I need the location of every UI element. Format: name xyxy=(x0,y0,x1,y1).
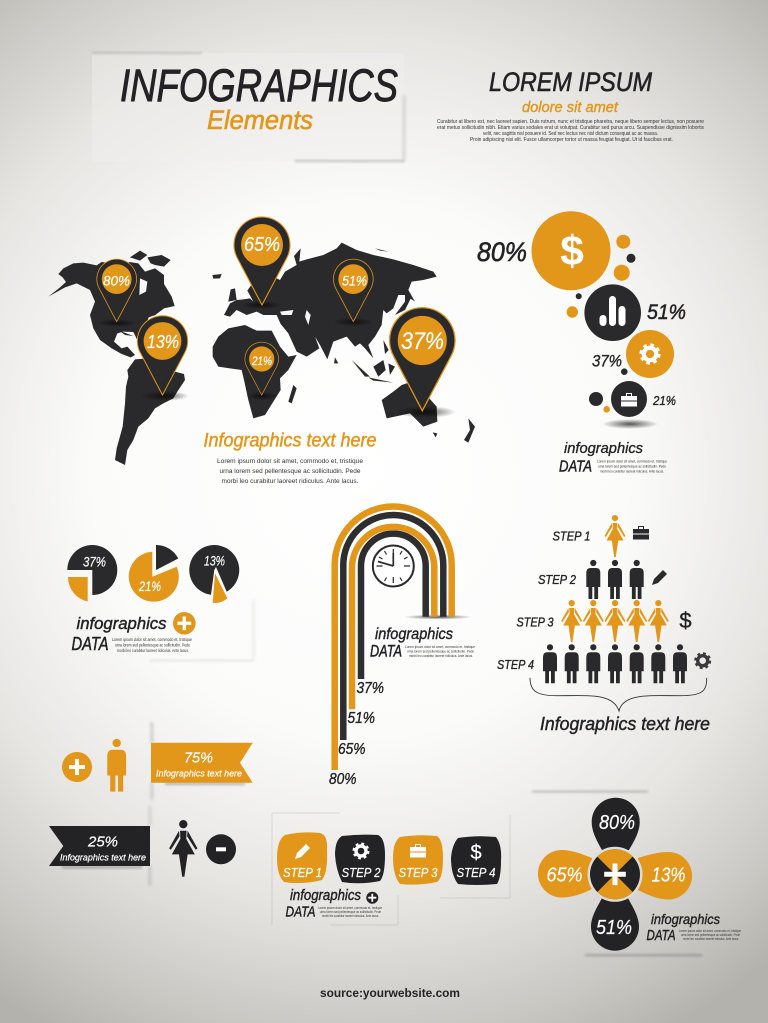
ribbon: 25% xyxy=(49,826,150,866)
petal: 51% xyxy=(591,898,639,951)
pie caption: urna lorem sed pellentesque ac sollicitudin. Pede xyxy=(115,642,190,648)
intro paragraph: velit, nec sagittis nisl posuere id. Sed nec lectus nec nisl dictum consequat ac ac massa. xyxy=(483,131,658,137)
bubble caption: Lorem ipsum dolor sit amet, commodo et, tristique xyxy=(597,460,667,464)
intro paragraph: erat metus sollicitudin nibh. Etiam varius sodales erat ut volutpat. Curabitur sed purus arcu. Suspendisse dignissim lobortis xyxy=(437,125,704,131)
bubble: 80% dollar xyxy=(477,211,610,290)
bubble: 21% briefcase xyxy=(611,381,676,417)
caption body: morbi leo curabitur laoreet ridiculus. Ante lacus. xyxy=(222,478,359,485)
ribbon: 75%: 75% xyxy=(184,750,213,766)
map pin: 80%: 80% xyxy=(103,274,130,288)
petal: 80%: 80% xyxy=(599,812,635,834)
map pin: 65%: 65% xyxy=(244,234,280,256)
flower caption xyxy=(646,911,741,944)
flower caption: urna lorem sed pellentesque ac sollicitudin. Pede xyxy=(681,933,740,937)
icon: pencil xyxy=(652,570,667,585)
brace xyxy=(530,678,707,711)
map pin: 13% xyxy=(137,316,188,395)
bubble: 37% gear: 37% xyxy=(592,352,622,370)
pie caption: Lorem ipsum dolor sit amet, commodo et, tristique xyxy=(112,637,192,642)
flower chart xyxy=(532,791,741,956)
row 2: men xyxy=(586,560,644,599)
world map xyxy=(48,243,475,465)
flower caption: Lorem ipsum dolor sit amet, commodo et, tristique xyxy=(679,929,741,933)
heading: INFOGRAPHICS: INFOGRAPHICS xyxy=(120,60,398,111)
arch: 51% xyxy=(352,527,434,709)
icon: dark woman xyxy=(169,820,197,877)
bubble: 37% gear xyxy=(592,330,674,378)
icon: gear xyxy=(695,653,710,668)
caption heading: Infographics text here xyxy=(204,430,376,452)
pie caption: infographics xyxy=(76,614,167,633)
subheading: Elements: Elements xyxy=(207,105,313,135)
flower caption: morbi leo curabitur laoreet ridiculus. Ante lacus. xyxy=(683,937,739,941)
row 4: men xyxy=(543,644,687,683)
intro paragraph xyxy=(437,119,704,143)
petal: 51%: 51% xyxy=(596,917,632,939)
bubble caption: DATA xyxy=(559,458,592,476)
map pin: 37% xyxy=(390,308,455,411)
icon: clock xyxy=(373,546,414,586)
intro paragraph: Proin adipiscing nisi elit. Fusce ullamcorper tortor ut massa feugiat feugiat. Ut id faucibus erat. xyxy=(470,137,673,143)
steps caption: infographics xyxy=(290,888,361,904)
step labels: STEP 4 xyxy=(497,657,534,672)
map pin shadows xyxy=(97,301,456,418)
bubble caption: infographics xyxy=(564,440,643,457)
row 1: woman xyxy=(604,515,626,557)
map pin: 80% xyxy=(97,259,137,322)
icon: dark plus xyxy=(366,892,378,904)
pie: 13%: 13% xyxy=(204,552,225,568)
bubble caption xyxy=(559,440,667,476)
ribbon: 75%: Infographics text here xyxy=(156,769,242,780)
icon: plus xyxy=(173,612,196,635)
arch caption: infographics xyxy=(375,626,453,643)
steps caption: DATA xyxy=(286,904,316,920)
step 2: STEP 2 xyxy=(342,866,381,880)
step labels xyxy=(497,528,590,672)
step labels: STEP 2 xyxy=(538,572,577,587)
petal: 13%: 13% xyxy=(652,864,686,886)
step labels: STEP 1 xyxy=(552,528,590,544)
pie: 13% xyxy=(189,545,239,603)
panel: title xyxy=(92,52,405,162)
arch labels: 37% xyxy=(356,680,384,697)
petal: 65% xyxy=(538,850,592,898)
steps caption: Lorem ipsum dolor sit amet, commodo et, tristique xyxy=(318,906,382,910)
icon: dollar: $ xyxy=(679,608,692,633)
pie caption: DATA xyxy=(72,634,108,654)
arch caption: Lorem ipsum dolor sit amet, commodo et, tristique xyxy=(405,645,475,649)
caption body: urna lorem sed pellentesque ac sollicitudin. Pede xyxy=(220,468,361,475)
small decorative bubbles xyxy=(567,235,636,413)
arch labels: 51% xyxy=(348,710,375,727)
icon: briefcase xyxy=(633,526,649,540)
caption body: Lorem ipsum dolor sit amet, commodo et, tristique xyxy=(217,458,363,465)
step 4: $ xyxy=(470,842,482,864)
step 4 xyxy=(451,836,501,885)
arch: 65% xyxy=(343,515,443,740)
intro block xyxy=(437,67,704,143)
flower caption: DATA xyxy=(646,927,676,944)
petal: 80% xyxy=(592,798,640,850)
center plus hub xyxy=(588,847,642,902)
arch chart xyxy=(329,507,475,788)
bubble: 21% briefcase: 21% xyxy=(652,393,676,408)
pie caption: morbi leo curabitur laoreet ridiculus. Ante lacus. xyxy=(117,648,189,653)
heading: lorem ipsum: LOREM IPSUM xyxy=(489,67,652,97)
pie: 37% xyxy=(67,545,117,602)
bubble caption: urna lorem sed pellentesque ac sollicitudin. Pede xyxy=(598,464,666,468)
step 1 xyxy=(277,832,327,883)
arch: 80% xyxy=(335,507,452,770)
arch labels xyxy=(329,680,384,788)
subheading: dolore sit amet: dolore sit amet xyxy=(522,99,619,116)
intro paragraph: Curabitur at libero est, nec laoreet sapien. Duis rutrum, nunc et tristique pharetra, neque libero semper lectus, non posuere xyxy=(437,119,704,125)
bubble: 80% dollar: 80% xyxy=(477,237,527,267)
pie: 21% xyxy=(129,545,179,602)
steps caption: urna lorem sed pellentesque ac sollicitudin. Pede xyxy=(320,910,381,914)
pyramid caption: Infographics text here xyxy=(540,713,710,734)
steps caption: morbi leo curabitur laoreet ridiculus. Ante lacus. xyxy=(322,914,379,918)
pie: 37%: 37% xyxy=(83,554,106,570)
ribbon: 25%: Infographics text here xyxy=(60,853,146,864)
icon: plus circle xyxy=(62,752,92,782)
row 3: women xyxy=(561,600,669,642)
ribbons panel xyxy=(49,722,253,886)
arch caption xyxy=(370,626,475,660)
map pin: 21%: 21% xyxy=(251,356,272,368)
bubble: 51% bars: 51% xyxy=(647,301,686,324)
arch labels: 65% xyxy=(338,741,366,758)
map pin: 37%: 37% xyxy=(401,328,444,355)
flower caption: infographics xyxy=(651,911,720,927)
arch caption: morbi leo curabitur laoreet ridiculus. Ante lacus. xyxy=(409,654,473,658)
arch caption: DATA xyxy=(370,642,402,660)
petal: 13% xyxy=(638,852,692,900)
map pin: 21% xyxy=(245,342,279,395)
map pin: 51% xyxy=(333,259,373,322)
bubble chart xyxy=(477,211,686,475)
panel: steps xyxy=(272,813,510,925)
map pin: 65% xyxy=(234,217,290,305)
ribbon: 75% xyxy=(151,743,253,783)
step 4: STEP 4 xyxy=(456,866,496,880)
arch labels: 80% xyxy=(329,771,357,788)
arch caption: urna lorem sed pellentesque ac sollicitudin. Pede xyxy=(407,650,474,654)
icon: orange man xyxy=(107,739,126,792)
pie caption xyxy=(72,614,192,654)
pie: 21%: 21% xyxy=(138,578,161,594)
step 1: STEP 1 xyxy=(283,866,322,880)
step 3 xyxy=(393,835,443,885)
step labels: STEP 3 xyxy=(516,614,554,630)
icon: minus circle xyxy=(206,834,236,864)
panel: pie charts xyxy=(67,545,254,661)
bubble: 51% bars xyxy=(584,284,686,341)
bubble caption: morbi leo curabitur laoreet ridiculus. Ante lacus. xyxy=(600,470,664,474)
people pyramid xyxy=(497,515,710,734)
caption body xyxy=(217,458,363,485)
map caption xyxy=(204,430,376,485)
step 3: STEP 3 xyxy=(398,866,438,880)
step 2 xyxy=(335,835,385,883)
bubble: 80% dollar: $ xyxy=(560,227,584,274)
steps caption xyxy=(286,888,382,920)
map pin: 51%: 51% xyxy=(342,274,367,288)
petal: 65%: 65% xyxy=(546,864,582,886)
arch: 37% xyxy=(361,534,426,679)
ribbon: 25%: 25% xyxy=(87,834,118,850)
source line: source:yourwebsite.com xyxy=(320,986,460,1000)
map pin: 13%: 13% xyxy=(147,332,179,352)
